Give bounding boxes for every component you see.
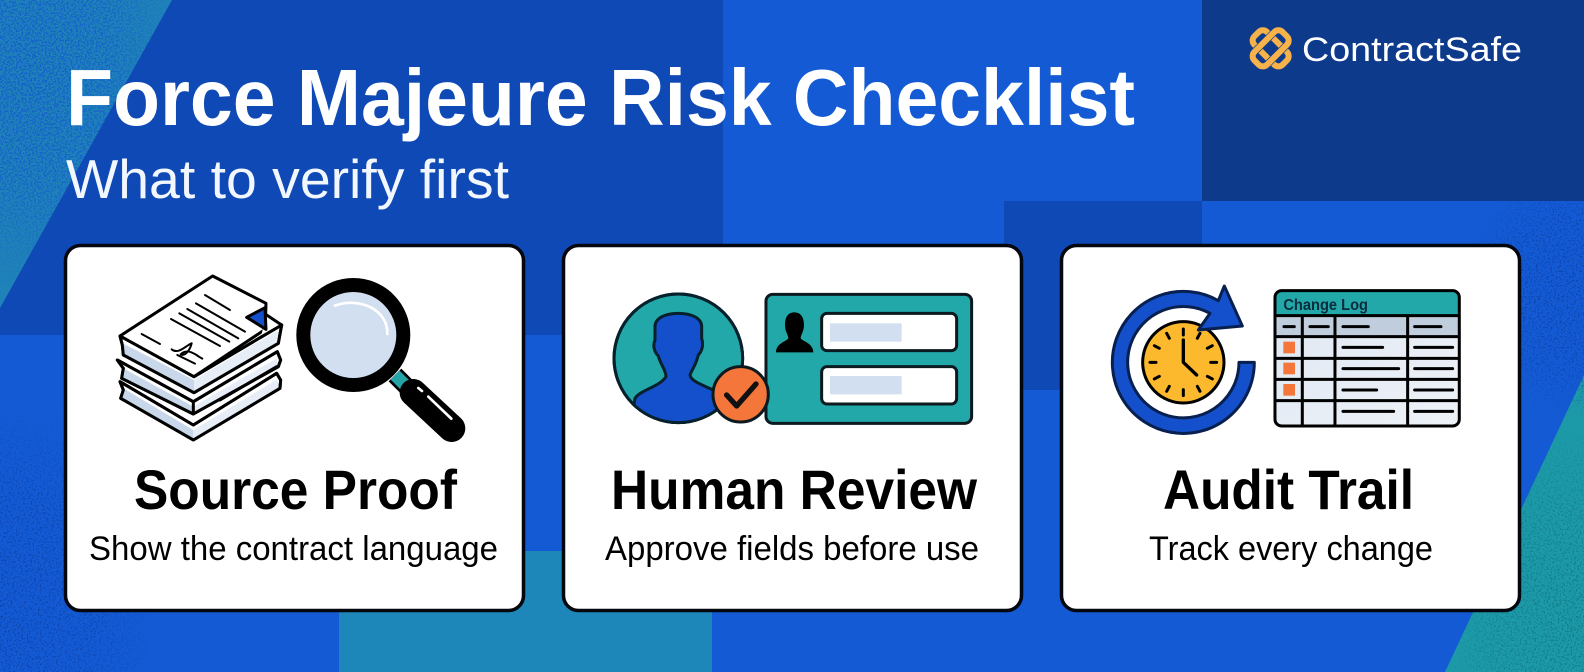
logo: ContractSafe	[1250, 28, 1522, 69]
icon: person with approval badge	[614, 294, 972, 430]
panel: human review	[564, 246, 1022, 610]
panel: audit trail	[1062, 246, 1520, 610]
icon: clock with circular arrow	[1112, 286, 1254, 433]
icon: magnifying glass	[303, 285, 452, 428]
icon: change log table	[1275, 291, 1459, 426]
table title: Change Log	[1283, 297, 1368, 314]
panel: source proof	[66, 246, 524, 610]
subtitle: What to verify first	[66, 148, 509, 210]
icon: document stack	[117, 276, 282, 440]
description: source proof: Show the contract language	[89, 530, 498, 568]
heading: source proof: Source Proof	[134, 458, 457, 521]
description: audit trail: Track every change	[1149, 530, 1433, 568]
icon: interlocked rings	[1250, 28, 1291, 69]
logo wordmark: ContractSafe	[1302, 31, 1522, 69]
heading: human review: Human Review	[611, 458, 977, 521]
title: Force Majeure Risk Checklist	[66, 53, 1135, 142]
description: human review: Approve fields before use	[605, 530, 979, 568]
heading: audit trail: Audit Trail	[1163, 458, 1414, 521]
